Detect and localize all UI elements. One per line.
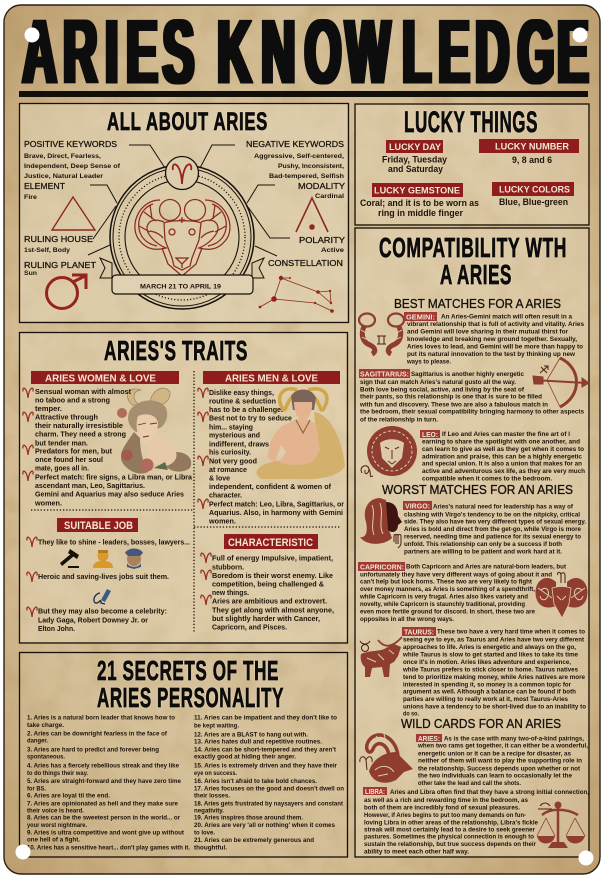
bar: suitable job: SUITABLE JOB [64,520,133,532]
secrets list: left column: 8. Aries can be the sweetest person in the world... or [27,815,180,822]
ruling planet [24,260,97,277]
aries text: other take the lead and call the shots. [418,780,521,787]
positive keywords: POSITIVE KEYWORDS [24,139,117,149]
taurus text: seeing eye to eye, as Taurus and Aries have two very different [403,636,585,643]
taurus text: approaches to life. Aries is energetic and always on the go, [403,644,576,651]
leo text: admiration and praise, this can be a highly energetic [422,453,582,460]
text: characteristic: stubborn. [212,562,244,571]
sagittarius text: their pants, so this relationship is one that is sure to be filled [360,394,542,401]
capricorn text [358,562,567,623]
aries text [416,734,588,787]
panel: 21 secrets [20,652,348,857]
text: women and love: but tender man. [35,438,88,447]
icon: taurus bull [360,637,402,677]
libra text: as well as a rich and rewarding time in the bedroom, as [364,797,528,804]
positive keywords: Independent, Deep Sense of [24,163,121,170]
text: women and love: temper. [35,404,62,413]
heading: 21 secrets [97,655,284,713]
capricorn text: can't help but lock horns. These two are very likely to fight [360,579,533,586]
leo text: can learn to give as well as they get when it comes to [422,446,584,453]
ruling planet: Sun [24,270,37,277]
gemini text: and Gemini will love sharing in their mutual thirst for [407,329,568,336]
icon: aries ram [360,734,413,783]
heading: 21 secrets: ARIES PERSONALITY [97,682,284,713]
icon: worker [93,550,113,568]
icon: aries constellation [259,276,334,313]
libra text: ability to meet each other half way. [364,848,469,855]
libra text: both of them are incredibly fond of sexual pleasures. [364,804,520,811]
constellation: CONSTELLATION [268,258,343,268]
secrets list: left column: 2. Aries can be downright fearless in the face of [27,730,168,737]
heading: all about aries: ALL ABOUT ARIES [107,108,268,136]
element: ELEMENT [24,181,66,191]
virgo text: Aries is bold and direct from the get-go, while Virgo is more [404,526,581,533]
leo text: active and adventurous sex life, as they are very much [422,468,585,475]
lucky gemstone: Coral; and it is to be worn as [360,198,479,208]
text: suitable job 2: Heroic and saving-lives jobs suit them. [38,572,169,581]
secrets list: left column: 4. Aries has a fiercely rebellious streak and they like [27,763,179,770]
sagittarius text [359,369,584,423]
icon: libra scales [537,802,585,848]
aries text: energetic union or it can be a recipe for disaster, as [418,750,571,757]
lucky day: LUCKY DAY [389,142,442,153]
illustration: aries woman [117,388,192,474]
secrets list: right column: exactly good at hiding their anger. [194,754,296,761]
secrets list: right column: 11. Aries can be impatient and they don't like to [194,715,337,722]
taurus text: These two have a very hard time when it comes to [437,629,585,636]
secrets list: right column: 18. Aries gets frustrated by naysayers and constant [194,801,344,808]
taurus text: once it's in motion. Aries likes adventure and experience, [403,659,571,666]
text: characteristic: Capricorn, and Pisces. [212,623,287,632]
gemini text: put its natural innovation to the test by thinking up new [407,351,576,358]
text: suitable job 1: They like to shine - leaders, bosses, lawyers... [38,538,190,547]
date ribbon: MARCH 21 TO APRIL 19 [140,284,221,290]
text: men and love: character. [209,491,242,500]
subheading: worst matches: WORST MATCHES FOR AN ARIES [382,483,573,497]
secrets list: right column: 19. Aries inspires those around them. [194,815,303,822]
panel: aries's traits [20,332,348,643]
leader lines [88,145,290,256]
heading: aries's traits: ARIES'S TRAITS [104,335,248,366]
lucky number: 9, 8 and 6 [512,155,552,165]
virgo text: reserved, needing time and patience for its sexual energy to [404,534,581,541]
text: women and love: women. [34,498,62,507]
ruling planet: RULING PLANET [24,260,97,270]
dotted dividers [31,371,341,632]
secrets list: left column: take charge. [27,722,64,729]
text: characteristic [201,553,334,632]
bar: aries men and love [203,371,340,384]
positive keywords [24,139,121,180]
text: characteristic: Boredom is their worst enemy. Like [212,571,333,580]
text: men and love: & love [209,473,230,482]
taurus text: argument as well. Although a balance can be found if both [403,689,576,696]
secrets list: left column: for BS. [27,785,46,792]
ruling house: 1st-Self, Body [24,247,70,254]
aries text: ARIES: [418,736,440,743]
leo text: earning to share the spotlight with one another, and [422,439,580,446]
secrets list: right column: 13. Aries hates dull and repetitive routines. [194,739,322,746]
text: men and love: Aquarius. Also, in harmony with Gemini [209,508,343,517]
text: men and love [198,388,344,526]
text: men and love: mysterious and [209,431,260,440]
aries text: the relationship. Success depends upon whether or not [418,765,581,772]
leo text: LEO: [422,432,438,439]
aries text: neither of them will want to play the supporting role in [418,758,582,765]
lucky day: and Saturday [388,164,443,174]
lucky colors: Blue, Blue-green [499,197,568,207]
libra text: However, if Aries begins to put too many demands on fun- [364,812,526,819]
libra text: sustain the relationship, but true success depends on their [364,841,536,848]
sagittarius text: SAGITTARIUS: [360,372,409,378]
secrets list: left column: 10. Aries has a sensitive heart... don't play games with it. [27,844,190,851]
sagittarius text: Both love being social, active, and living by the seat of [360,386,525,393]
text: men and love: routine & seduction [209,397,276,406]
secrets list: right column: 20. Aries are very 'all or nothing' when it comes [194,822,335,829]
heading: 21 secrets: 21 SECRETS OF THE [97,655,279,686]
taurus text: do so. [403,710,419,717]
text: suitable job 3: Elton John. [38,624,75,633]
capricorn text: opposites in all the wrong ways. [360,616,454,623]
icon: ram head [135,200,230,276]
virgo text: clashing with Virgo's tendency to be on the nitpicky, critical [404,511,580,518]
taurus text: while Taurus prefers to stick closer to home. Taurus natives [402,667,578,674]
modality: MODALITY [298,181,345,191]
capricorn text: over money manners, as Aries is something of a spendthrift, [360,586,535,593]
element [24,181,66,201]
illustration: aries man [257,389,345,479]
secrets list: right column: be kept waiting. [194,723,239,730]
text: women and love: mate, goes all in. [35,463,89,472]
libra text: loving Libra in other areas of the relationship, Libra's fickle [364,819,538,826]
zodiac seal rings [110,165,254,309]
title rule [19,91,588,97]
text: women and love: once found her soul [35,455,103,464]
capricorn text: novelty, while Capricorn is staunchly traditional, providing [360,601,525,608]
icon: mars symbol [46,275,86,308]
taurus text: interested in spending it, so money is a common topic for [403,681,571,688]
text: women and love: Gemini and Aquarius may also seduce Aries [35,490,184,499]
sagittarius text: sign that can match Aries's natural gusto all the way. [360,379,516,386]
text: suitable job 3 [27,607,167,633]
positive keywords: Brave, Direct, Fearless, [24,153,101,160]
modality: Cardinal [315,193,344,200]
capricorn text: Both Capricorn and Aries are natural-born leaders, but [406,564,567,571]
taurus text: tend to prioritize making money, while Aries natives are more [403,674,585,681]
capricorn text: even more fertile ground for discord. In short, these two are [360,608,535,615]
text: women and love: Attractive through [35,412,98,421]
secrets list: left column: danger. [27,738,48,745]
date ribbon [100,258,264,294]
secrets list: left column: to do things their way. [27,770,88,777]
virgo text: unfold. This relationship can only be a success if both [404,541,562,548]
negative keywords: Pushy, Inconsistent, [278,163,344,170]
aries text: the two individuals can learn to occasionally let the [418,773,572,780]
text: women and love: charm. They need a strong [35,430,126,439]
text: men and love: his curiosity. [209,448,251,457]
text: men and love: him... staying [209,422,253,431]
negative keywords [246,139,344,180]
modality [298,181,345,200]
secrets list: right column: 14. Aries can be short-tempered and they aren't [194,746,337,753]
bar: aries women and love [31,371,179,384]
gemini text: Aries loves to lead, and Gemini will be more than happy to [407,344,583,351]
polarity: POLARITY [299,235,345,245]
text: men and love: has to be a challenge. [209,405,283,414]
virgo text: VIRGO: [405,504,430,510]
sagittarius text: the bedroom, their sexual compatibility bringing harmony to other aspects [360,409,584,416]
capricorn text: while Capricorn is very frugal. Aries also likes variety and [359,593,528,600]
gemini text: knowledge and breaking new ground together. Sexually, [407,336,577,343]
secrets list: left column: one hell of a fight. [27,837,80,844]
sagittarius text: Sagittarius is another highly energetic [411,371,524,378]
bar: characteristic: CHARACTERISTIC [228,537,313,549]
lucky colors: LUCKY COLORS [499,184,570,196]
secrets list: left column: 9. Aries is ultra competitive and wont give up without [27,830,185,837]
text: women and love: their naturally irresistible [35,421,123,430]
icon: fire triangle [52,197,95,230]
title: ARIES KNOWLEDGE [23,1,589,103]
text: characteristic: competition, being challenged & [212,579,325,588]
text: women and love: Sensual woman with almost [35,387,132,396]
secrets list: left column [27,715,190,851]
gemini text [404,312,584,365]
subheading: wild cards: WILD CARDS FOR AN ARIES [401,717,561,731]
icon: aries glyph medallion [166,156,198,190]
panel: all about aries [20,104,348,322]
gemini text: An Aries-Gemini match will often result in a [441,314,572,321]
secrets list: left column: 7. Aries are opinionated as hell and they make sure [27,801,178,808]
text: characteristic: Full of energy Impulsive, impatient, [212,554,333,563]
text: women and love: no taboo and a strong [35,395,110,404]
secrets list: left column: spontaneous. [27,754,65,761]
text: men and love: indifferent, draws [209,439,269,448]
secrets list: right column: to love. [194,829,215,836]
text: women and love: Perfect match: fire signs, a Libra man, or Libra [35,472,193,481]
ruling house: RULING HOUSE [24,234,93,244]
gemini text: vibrant relationship that is full of activity and vitality. Aries [407,321,584,328]
negative keywords: NEGATIVE KEYWORDS [246,139,344,149]
negative keywords: Aggressive, Self-centered, [254,153,344,160]
subheading: best matches: BEST MATCHES FOR A ARIES [394,297,561,311]
lucky number: LUCKY NUMBER [495,142,569,152]
virgo text: partners are willing to be patient and work hard at it. [404,548,562,555]
libra text: Aries and Libra often find that they have a strong initial connection, [390,789,589,796]
text: characteristic: but slightly harder with Cancer, [212,614,320,623]
sagittarius text: with fun and discovery. These two are also a fabulous match in [359,401,548,408]
polarity [299,235,345,254]
lucky day: Friday, Tuesday [382,154,447,164]
virgo text: Aries's natural need for leadership has a way of [433,504,574,511]
secrets list: right column: 21. Aries can be extremely generous and [194,837,314,844]
sagittarius text: of the relationship in turn. [360,416,438,423]
icon: gavel [60,549,79,568]
leo text: If Leo and Aries can master the fine art of l [442,431,570,438]
icon: virgo profile [360,498,402,548]
libra text: LIBRA: [365,789,385,796]
taurus text: while Taurus is slow to get started and likes to take its time [402,651,578,658]
leo text: and special union. It is also a union that makes for an [422,461,582,468]
virgo text [403,501,586,555]
text: men and love: at romance [209,465,247,474]
gemini text: GEMINI: [406,314,435,322]
heading: compatibility [379,232,567,290]
lucky number [479,139,579,165]
lucky gemstone [360,183,479,218]
polarity: Active [321,247,344,254]
taurus text: unions have a tendency to be short-lived due to an inability to [403,703,586,710]
text: characteristic: new things. [212,588,249,597]
icon: leo lion [361,426,417,477]
secrets list: right column [194,715,344,851]
text: women and love: ascendant man, Leo, Sagittarius. [35,481,145,490]
leo text: compatible when it comes to the bedroom. [422,475,552,482]
text: men and love: women. [208,517,236,526]
lucky colors [492,182,574,207]
negative keywords: Bad-tempered, Selfish [269,173,344,180]
taurus text: parties are willing to really work at it, most Taurus-Aries [403,696,568,703]
text: women and love: Predators for men, but [35,447,113,456]
libra text: pastures. Sometimes the physical connection is enough to [364,834,534,841]
aries text: As is the case with many two-of-a-kind pairings, [444,735,584,742]
icon: sagittarius bow [533,358,589,407]
icon: capricorn head [536,572,587,618]
gemini text: ways to please. [406,358,451,365]
lucky gemstone: ring in middle finger [378,208,464,218]
heading: compatibility: A ARIES [440,259,512,290]
secrets list: left column: 3. Aries are hard to predict and forever being [27,746,159,753]
lucky day [382,140,447,174]
secrets list: left column: their voice is heard. [27,808,84,815]
text: characteristic: They get along with almost anyone, [212,605,334,614]
panel: compatibility [355,228,589,857]
virgo text: side. They also have two very different types of sexual energy. [404,519,586,526]
secrets list: right column: their losses. [194,792,230,799]
capricorn text: CAPRICORN: [360,564,404,572]
panel: lucky things [355,104,589,225]
text: characteristic: Aries are ambitious and extrovert. [212,597,327,606]
secrets list: left column: your worst nightmare. [27,822,87,829]
text: men and love: Dislike easy things, [209,388,274,397]
lucky gemstone: LUCKY GEMSTONE [374,186,460,196]
secrets list: left column: 6. Aries are loyal til the end. [27,792,110,799]
capricorn text: unfortunately they have very different ways of going about it and [360,571,552,578]
ruling house [24,234,93,254]
taurus text [402,627,586,717]
aries text: when two rams get together, it can either be a wonderful, [417,743,588,750]
text: men and love: independent, confident & women of [209,482,332,491]
icon: gemini twins [359,314,404,354]
secrets list: right column: 16. Aries isn't afraid to take bold chances. [194,778,317,785]
element: Fire [24,194,37,201]
text: men and love: Perfect match: Leo, Libra, Sagittarius, or [209,499,344,508]
text: women and love [23,387,193,507]
libra text: streak will most certainly lead to a desire to seek greener [364,826,535,833]
libra text [363,787,589,855]
secrets list: right column: negativity. [194,808,224,815]
icon: microphone [94,589,111,604]
bar: aries women and love: ARIES WOMEN & LOVE [45,374,156,384]
icon: cardinal symbol [296,198,328,232]
bar: aries men and love: ARIES MEN & LOVE [225,374,318,384]
text: men and love: Not very good [209,456,257,465]
secrets list: right column: 15. Aries is extremely driven and they have their [194,763,337,770]
taurus text: TAURUS: [404,630,434,636]
secrets list: right column: 12. Aries are a BLAST to hang out with. [194,731,308,738]
text: suitable job 3: Lady Gaga, Robert Downey Jr. or [38,615,148,624]
secrets list: right column: 17. Aries focuses on the good and doesn't dwell on [194,785,344,792]
secrets list: left column: 5. Aries are straight-forward and they have zero time [27,778,181,785]
icon: police officer [125,548,143,569]
positive keywords: Justice, Natural Leader [24,173,103,180]
text: suitable job 3: But they may also become a celebrity: [38,607,167,616]
text: men and love: Best not to try to seduce [209,414,292,423]
secrets list: right column: thoughtful. [194,844,227,851]
leo text [420,430,585,482]
secrets list: left column: 1. Aries is a natural born leader that knows how to [27,715,175,722]
secrets list: right column: eye on success. [194,770,237,777]
